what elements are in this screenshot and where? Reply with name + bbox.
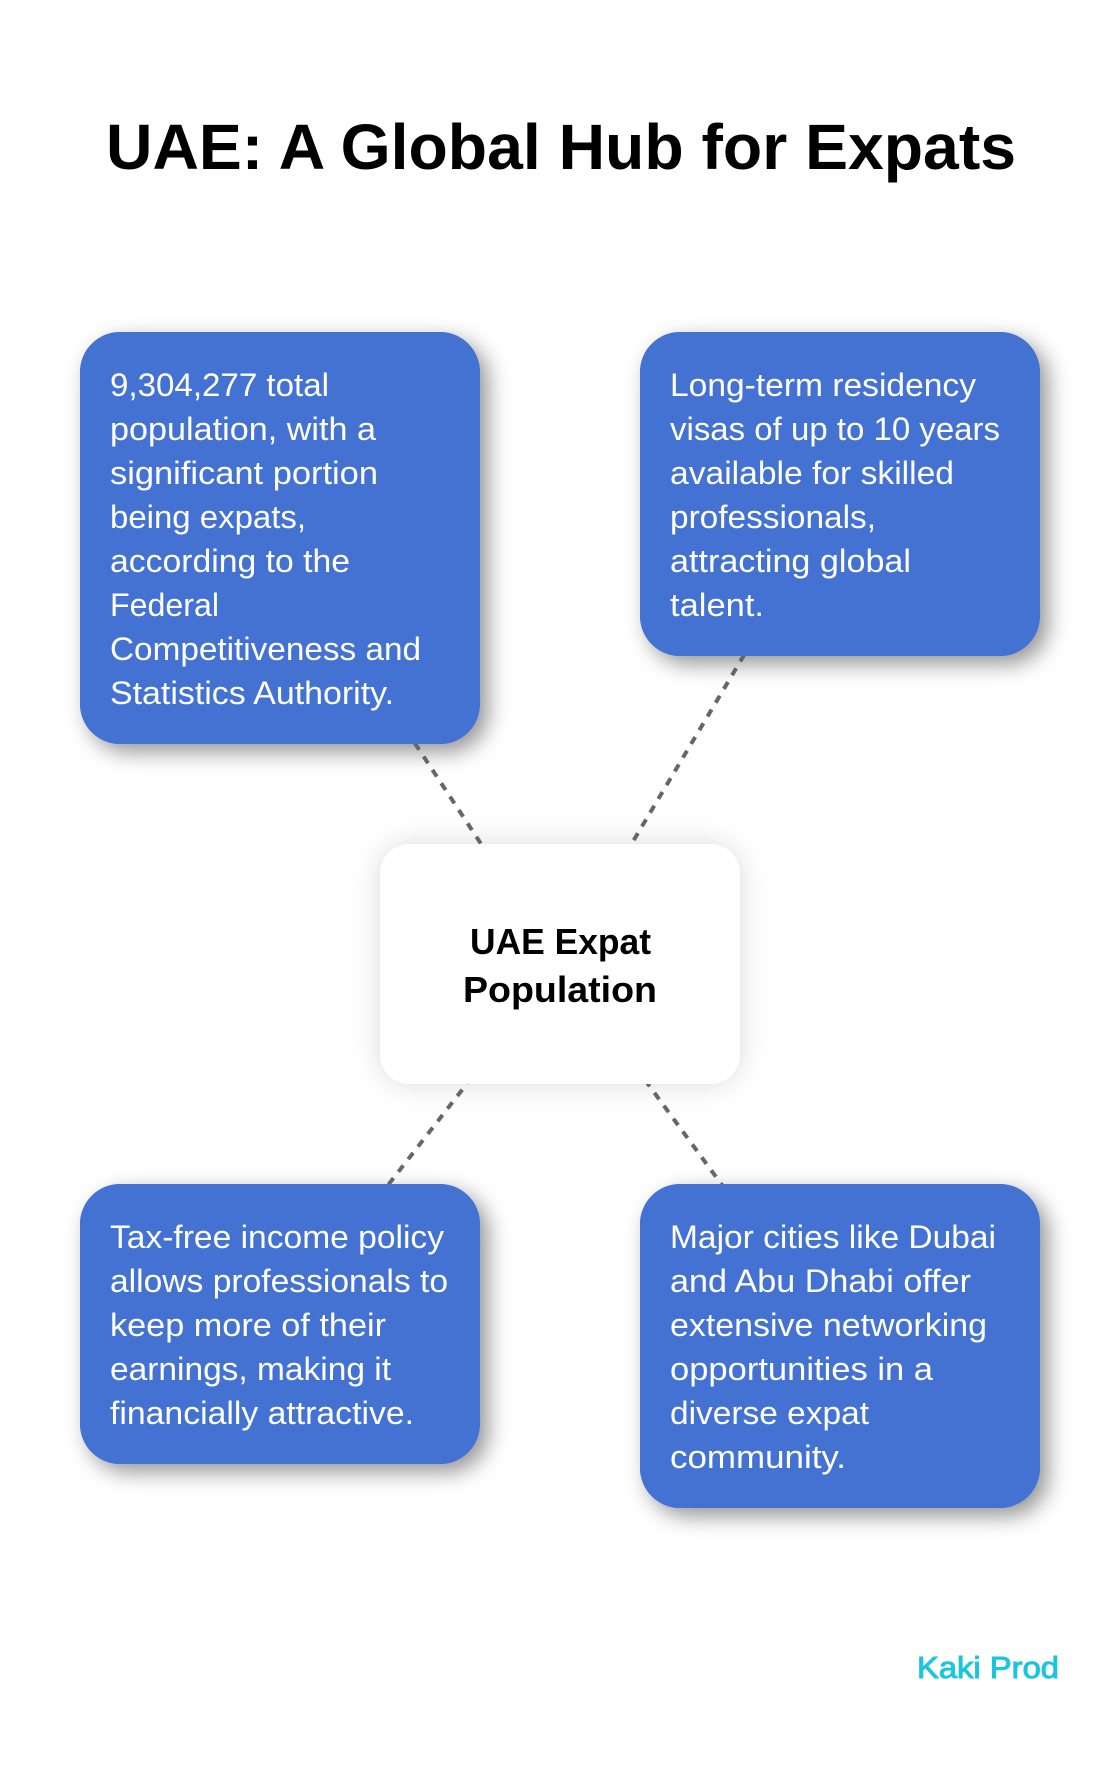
panel: total population: Statistics Authority. <box>110 675 394 711</box>
panel: central node: Population <box>463 969 657 1010</box>
panel: networking cities: Major cities like Dubai <box>670 1219 996 1255</box>
logo: Kaki Prod: Kaki Prod <box>917 1650 1059 1685</box>
panel: networking cities: extensive networking <box>670 1307 987 1343</box>
panel: total population: being expats, <box>110 499 306 535</box>
panel: residency visas: attracting global <box>670 543 911 579</box>
panel: total population: Federal <box>110 587 219 623</box>
panel: residency visas: talent. <box>670 587 764 623</box>
panel: networking cities: diverse expat <box>670 1395 869 1431</box>
panel: total population: 9,304,277 total <box>110 367 329 403</box>
panel: central node <box>380 844 740 1084</box>
panel: residency visas: professionals, <box>670 499 876 535</box>
panel: tax-free income: keep more of their <box>110 1307 386 1343</box>
panel: total population: population, with a <box>110 411 377 447</box>
panel: networking cities: and Abu Dhabi offer <box>670 1263 971 1299</box>
panel: residency visas <box>640 332 1040 656</box>
panel: tax-free income <box>80 1184 480 1464</box>
panel: networking cities: opportunities in a <box>670 1351 934 1387</box>
panel: total population <box>80 332 480 744</box>
panel: total population: significant portion <box>110 455 378 491</box>
panel: networking cities <box>640 1184 1040 1508</box>
dashed connectors <box>280 494 840 1346</box>
panel: tax-free income: Tax-free income policy <box>110 1219 445 1255</box>
panel: residency visas: Long-term residency <box>670 367 977 403</box>
panel: residency visas: available for skilled <box>670 455 954 491</box>
panel: networking cities: community. <box>670 1439 846 1475</box>
panel: tax-free income: allows professionals to <box>110 1263 448 1299</box>
panel: central node: UAE Expat <box>470 921 651 962</box>
panel: tax-free income: earnings, making it <box>110 1351 391 1387</box>
panel: residency visas: visas of up to 10 years <box>670 411 1000 447</box>
panel: total population: according to the <box>110 543 350 579</box>
panel: total population: Competitiveness and <box>110 631 421 667</box>
panel: tax-free income: financially attractive. <box>110 1395 414 1431</box>
title: UAE: A Global Hub for Expats <box>106 111 1016 183</box>
